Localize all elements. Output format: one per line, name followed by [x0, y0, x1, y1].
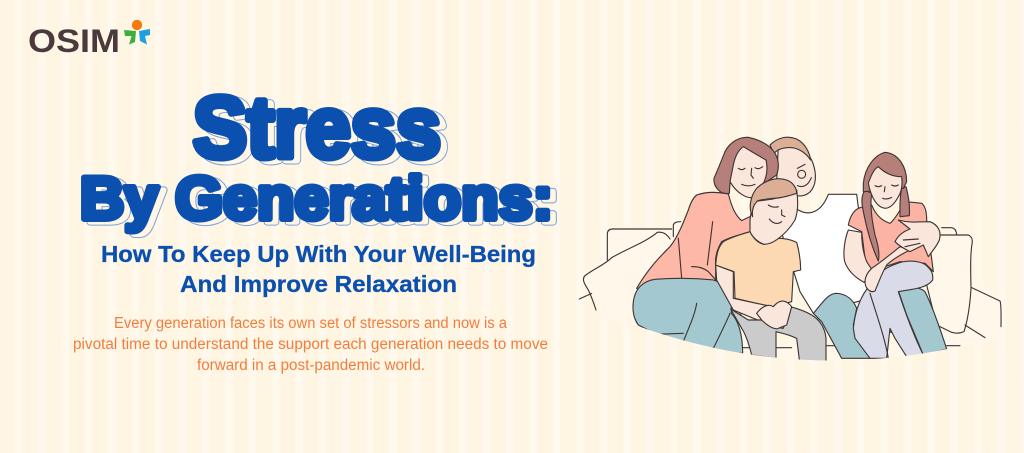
illustration: family on a sofa — [579, 137, 1001, 378]
sofa — [578, 221, 1002, 348]
intro paragraph: forward in a post-pandemic world. — [197, 357, 425, 374]
intro paragraph: Every generation faces its own set of stressors and now is a — [114, 315, 507, 332]
intro paragraph: pivotal time to understand the support each generation needs to move — [73, 336, 548, 353]
boy — [716, 179, 826, 365]
logo: OSIM — [28, 20, 150, 59]
title: Stress: Stress — [199, 83, 447, 179]
subtitle: And Improve Relaxation — [180, 271, 457, 297]
logo icon — [124, 20, 150, 44]
grandmother — [770, 137, 947, 358]
mother — [633, 137, 778, 353]
title: By Generations: By Generations: — [86, 168, 559, 235]
title: By Generations: By Generations: — [80, 165, 553, 232]
title: By Generations: By Generations: — [86, 168, 559, 235]
subtitle — [101, 241, 536, 297]
logo wordmark: OSIM — [28, 23, 120, 59]
title: Stress: Stress — [193, 80, 441, 176]
girl — [844, 152, 940, 358]
intro paragraph — [73, 315, 548, 374]
subtitle: How To Keep Up With Your Well-Being — [101, 241, 536, 267]
title: Stress: Stress — [199, 83, 447, 179]
